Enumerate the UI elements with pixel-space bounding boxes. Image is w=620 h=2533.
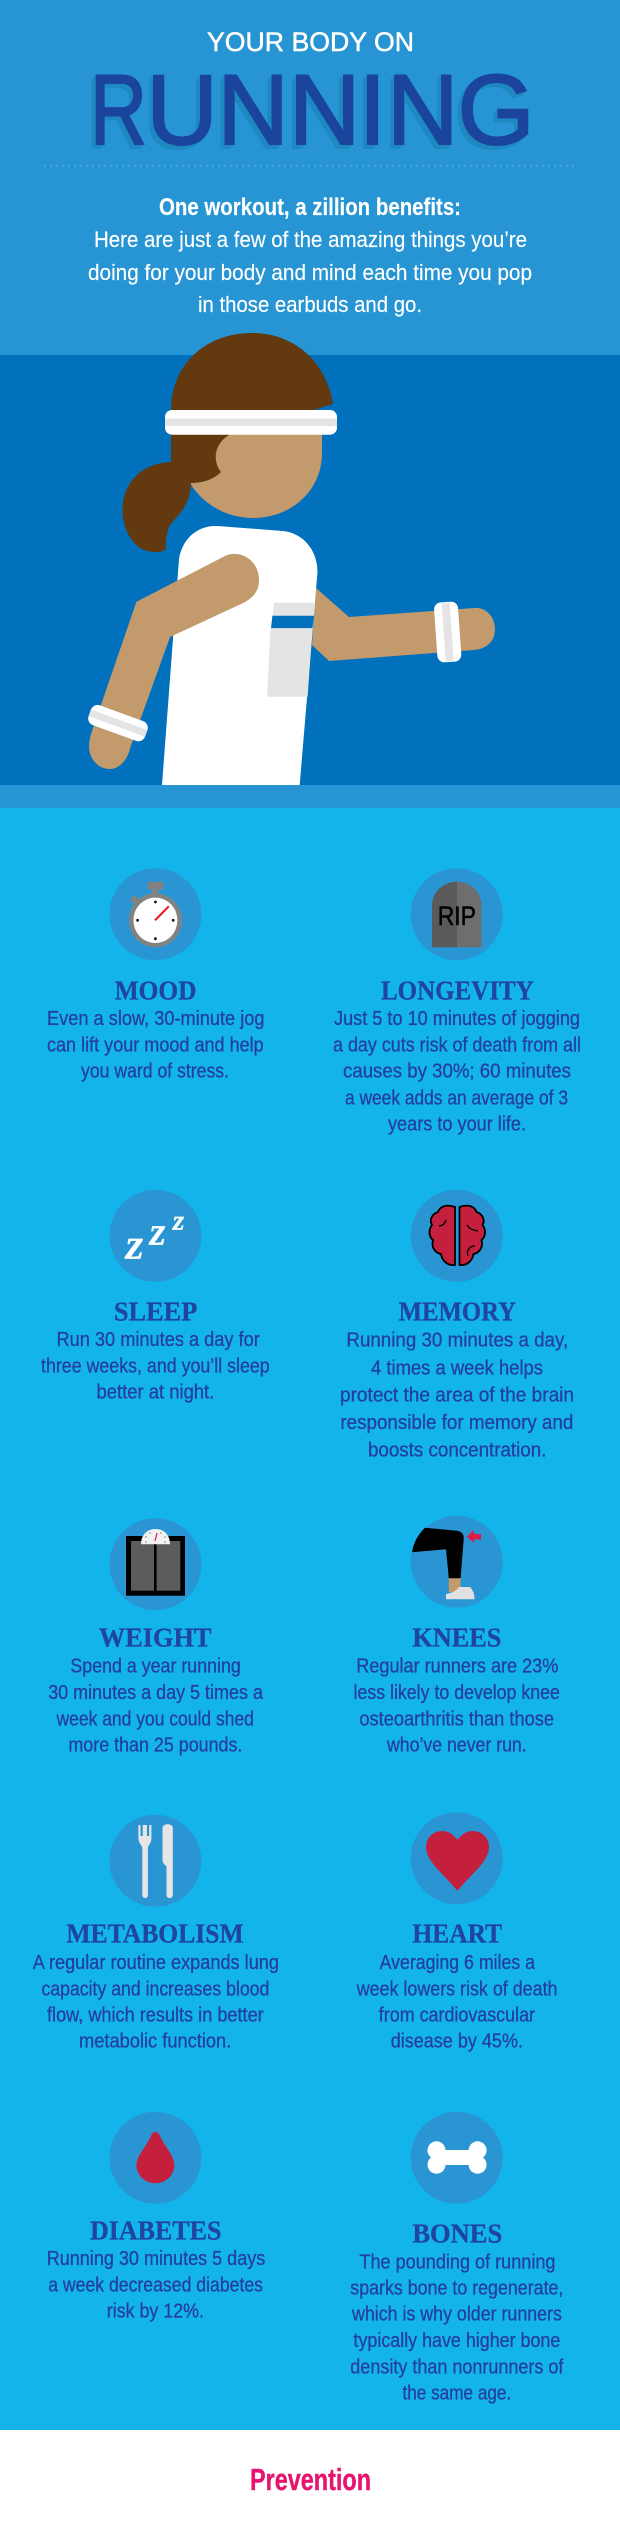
- intro text: Here are just a few of the amazing things you’re: [94, 227, 527, 252]
- headband: [165, 410, 337, 435]
- text: mood: can lift your mood and help: [47, 1034, 264, 1057]
- text: heart: disease by 45%.: [391, 2030, 523, 2053]
- icon: heart: [426, 1831, 489, 1891]
- face: [190, 410, 322, 518]
- text: sleep: Run 30 minutes a day for: [56, 1328, 260, 1351]
- text: knees: Regular runners are 23%: [356, 1655, 558, 1678]
- text: longevity: years to your life.: [388, 1113, 526, 1136]
- text: memory: Running 30 minutes a day,: [346, 1329, 568, 1352]
- text: longevity: causes by 30%; 60 minutes: [343, 1060, 571, 1083]
- card: metabolism: [33, 1815, 279, 2053]
- text: sleep: [41, 1328, 270, 1404]
- card: memory: [340, 1190, 574, 1461]
- text: sleep: better at night.: [96, 1381, 214, 1404]
- card: mood: [47, 868, 264, 1083]
- panel: runner band: [0, 355, 620, 808]
- icon: zzz: Z: [148, 1221, 166, 1251]
- title: running: UNNING: [142, 58, 531, 169]
- card: bones: [350, 2112, 564, 2405]
- text: mood: Even a slow, 30-minute jog: [47, 1007, 264, 1030]
- text: weight: week and you could shed: [56, 1707, 254, 1730]
- heading: your body on: YOUR BODY ON: [207, 27, 414, 57]
- icon: zzz: Z: [172, 1213, 184, 1234]
- text: metabolism: capacity and increases blood: [42, 1977, 269, 2000]
- text: metabolism: [33, 1951, 279, 2053]
- text: knees: less likely to develop knee: [354, 1681, 560, 1704]
- heading: diabetes: DIABETES: [90, 2215, 221, 2245]
- icon: brain: [429, 1206, 485, 1265]
- logo: prevention: Prevention: [250, 2462, 371, 2497]
- title: running: R: [86, 58, 143, 169]
- text: weight: [48, 1655, 264, 1757]
- text: memory: boosts concentration.: [368, 1438, 546, 1461]
- text: memory: [340, 1329, 574, 1461]
- text: bones: sparks bone to regenerate,: [350, 2277, 563, 2300]
- title: running: UNNING: [146, 54, 535, 165]
- text: longevity: a day cuts risk of death from all: [333, 1034, 581, 1057]
- text: memory: protect the area of the brain: [340, 1384, 574, 1407]
- text: diabetes: a week decreased diabetes: [48, 2274, 263, 2297]
- wristband: left: [86, 703, 150, 743]
- text: bones: typically have higher bone: [354, 2329, 560, 2352]
- icon: bone: [428, 2141, 487, 2174]
- wristband: right: [434, 601, 462, 663]
- card: longevity: [333, 868, 581, 1136]
- text: weight: 30 minutes a day 5 times a: [48, 1681, 264, 1704]
- front arm: [89, 554, 259, 769]
- text: bones: The pounding of running: [359, 2250, 556, 2273]
- text: heart: Averaging 6 miles a: [380, 1951, 536, 1974]
- text: heart: [356, 1951, 558, 2053]
- heading: bones: BONES: [412, 2218, 502, 2248]
- title: running: R: [90, 54, 147, 165]
- heading: metabolism: METABOLISM: [66, 1919, 244, 1949]
- text: diabetes: risk by 12%.: [107, 2300, 204, 2323]
- intro text: [88, 194, 532, 317]
- heading: mood: MOOD: [115, 975, 196, 1005]
- intro text: One workout, a zillion benefits:: [159, 194, 461, 221]
- text: metabolism: metabolic function.: [79, 2030, 231, 2053]
- heading: weight: WEIGHT: [99, 1623, 212, 1653]
- text: bones: the same age.: [402, 2382, 511, 2405]
- icon: blood drop: [136, 2132, 174, 2183]
- text: memory: responsible for memory and: [340, 1411, 573, 1434]
- card: weight: [48, 1518, 264, 1757]
- illustration: runner: [86, 333, 495, 785]
- text: longevity: Just 5 to 10 minutes of jogging: [334, 1007, 580, 1030]
- icon: fork and knife: [138, 1824, 173, 1898]
- card: sleep: [41, 1190, 270, 1404]
- text: metabolism: A regular routine expands lung: [33, 1951, 279, 1974]
- shirt pocket: [267, 603, 315, 697]
- icon: tombstone: RIP: [438, 901, 476, 931]
- heading: knees: KNEES: [412, 1623, 501, 1653]
- text: heart: week lowers risk of death: [356, 1977, 558, 2000]
- heading: memory: MEMORY: [399, 1296, 516, 1326]
- title: running: UNNING: [144, 56, 533, 167]
- text: knees: who’ve never run.: [386, 1734, 527, 1757]
- text: heart: from cardiovascular: [379, 2003, 535, 2026]
- arrow: knee pain: [467, 1530, 481, 1543]
- icon: stopwatch: [129, 882, 182, 947]
- text: bones: [350, 2250, 564, 2405]
- intro text: doing for your body and mind each time you pop: [88, 260, 532, 285]
- text: knees: osteoarthritis than those: [359, 1707, 554, 1730]
- text: weight: Spend a year running: [70, 1655, 241, 1678]
- heading: heart: HEART: [412, 1919, 502, 1949]
- text: longevity: a week adds an average of 3: [345, 1086, 568, 1109]
- text: metabolism: flow, which results in better: [47, 2003, 264, 2026]
- text: bones: which is why older runners: [351, 2303, 562, 2326]
- panel: header: [0, 0, 620, 355]
- text: knees: [354, 1655, 560, 1757]
- panel: benefits: [0, 808, 620, 2430]
- icon: knee: [412, 1528, 481, 1599]
- card: heart: [356, 1812, 558, 2053]
- text: diabetes: Running 30 minutes 5 days: [47, 2247, 265, 2270]
- icon: scale: [126, 1529, 185, 1596]
- back arm: [312, 588, 495, 661]
- text: bones: density than nonrunners of: [350, 2355, 564, 2378]
- text: mood: you ward of stress.: [81, 1060, 229, 1083]
- heading: longevity: LONGEVITY: [381, 975, 534, 1005]
- hair and ponytail: [122, 400, 240, 552]
- card: knees: [354, 1516, 560, 1757]
- shirt: [162, 526, 318, 785]
- heading: sleep: SLEEP: [114, 1296, 197, 1326]
- text: longevity: [333, 1007, 581, 1136]
- text: sleep: three weeks, and you’ll sleep: [41, 1355, 270, 1378]
- icon: zzz: [124, 1213, 184, 1266]
- text: diabetes: [47, 2247, 265, 2323]
- text: mood: [47, 1007, 264, 1083]
- text: memory: 4 times a week helps: [371, 1356, 543, 1379]
- icon: zzz: Z: [124, 1233, 143, 1266]
- card: diabetes: [47, 2112, 265, 2323]
- title: running: R: [88, 56, 145, 167]
- icon: tombstone: [432, 882, 482, 947]
- text: weight: more than 25 pounds.: [68, 1734, 242, 1757]
- intro text: in those earbuds and go.: [198, 292, 422, 317]
